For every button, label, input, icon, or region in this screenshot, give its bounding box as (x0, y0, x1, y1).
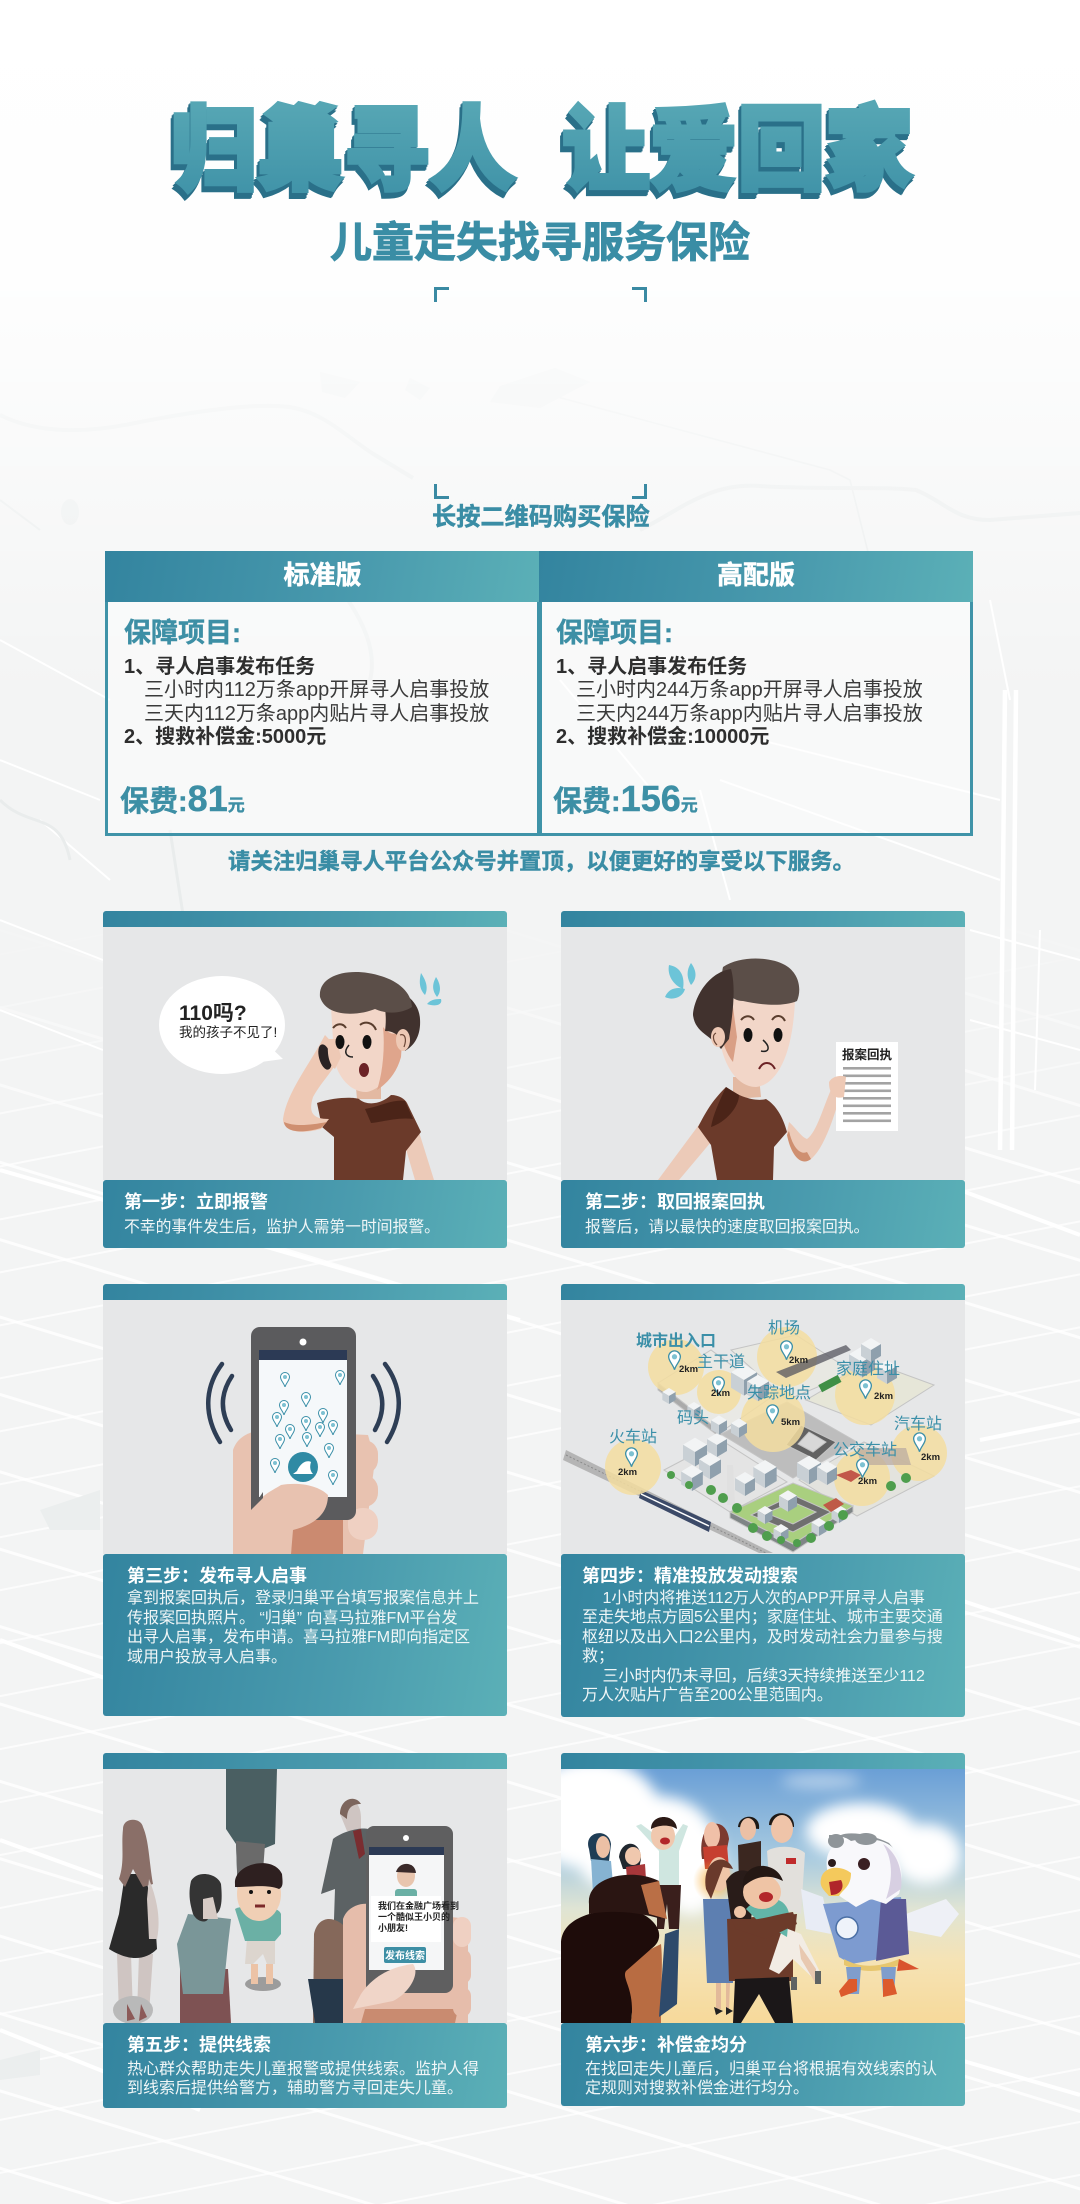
standard coverage list: 2、搜救补偿金:5000元 (124, 726, 326, 748)
premium coverage list: 三天内244万条app内贴片寻人启事投放 (576, 703, 923, 725)
map pins and distances: 5km (781, 1417, 800, 1428)
step 5 text: 到线索后提供给警方，辅助警方寻回走失儿童。 (127, 2080, 463, 2097)
step 4 text: 至走失地点方圆5公里内；家庭住址、城市主要交通 (582, 1609, 943, 1626)
icon: signal waves (208, 1364, 399, 1442)
child in parent's arms (731, 1866, 821, 1990)
receipt paper: 报案回执 (842, 1047, 892, 1062)
panel: step 1 (103, 911, 507, 1248)
step 4 title: 第四步：精准投放发动搜索 (582, 1566, 798, 1586)
phone with alert: 小朋友! (378, 1922, 408, 1933)
step 6 top bar (561, 1753, 965, 1769)
receipt paper (829, 1042, 898, 1131)
premium plan header (539, 551, 973, 602)
icon: sweat drops (420, 973, 441, 1005)
title: 归巢寻人 (171, 100, 516, 202)
map labels: 机场 (768, 1319, 800, 1337)
step 6 text (585, 2060, 937, 2097)
standing woman left (109, 1820, 159, 2024)
step 2 text: 报警后，请以最快的速度取回报案回执。 (585, 1219, 869, 1236)
premium fee: 保费:156元 (553, 778, 698, 819)
map pins and distances: 2km (858, 1476, 877, 1487)
standard coverage list: 三小时内112万条app开屏寻人启事投放 (144, 679, 489, 701)
man top center (226, 1769, 277, 1899)
panel: step 3 (103, 1284, 507, 1716)
illustration: man calling 110 (103, 927, 507, 1180)
premium coverage list (556, 656, 923, 748)
panel: premium plan (539, 551, 973, 836)
step 3 text: 出寻人启事，发布申请。喜马拉雅FM即向指定区 (127, 1629, 470, 1646)
panel: step 4 (561, 1284, 965, 1717)
step 5 text: 热心群众帮助走失儿童报警或提供线索。监护人得 (127, 2061, 479, 2078)
step 3 text: 域用户投放寻人启事。 (127, 1649, 287, 1666)
map labels: 汽车站 (894, 1415, 942, 1433)
step 5 title: 第五步：提供线索 (127, 2035, 271, 2055)
map pins and distances (618, 1341, 940, 1487)
QR code frame brackets (434, 287, 647, 499)
standard plan header: 标准版 (283, 560, 362, 590)
railway and train (563, 1450, 773, 1553)
map labels: 火车站 (609, 1428, 657, 1446)
step 4 text: 1小时内将推送112万人次的APP开屏寻人启事 (602, 1590, 925, 1607)
map labels: 城市出入口 (636, 1331, 716, 1350)
lost boy (235, 1863, 283, 1991)
background crowd (588, 1813, 805, 1929)
man on phone (283, 972, 434, 1180)
map pins and distances: 2km (711, 1388, 730, 1399)
foreground man from behind (561, 1875, 679, 2023)
standard coverage list: 1、寻人启事发布任务 (124, 656, 315, 678)
step 6 caption (561, 2023, 965, 2106)
step 2 top bar (561, 911, 965, 927)
phone with alert: 发布线索 (385, 1949, 425, 1962)
map pins and distances: 2km (921, 1452, 940, 1463)
step 6 text: 在找回走失儿童后，归巢平台将根据有效线索的认 (585, 2061, 937, 2078)
step 2 title: 第二步：取回报案回执 (585, 1192, 765, 1212)
step 6 title: 第六步：补偿金均分 (585, 2035, 747, 2055)
illustration: man with receipt (561, 927, 965, 1180)
glow (693, 1859, 737, 1903)
step 3 text (127, 1589, 479, 1666)
step 1 text: 不幸的事件发生后，监护人需第一时间报警。 (124, 1219, 440, 1236)
premium coverage list: 2、搜救补偿金:10000元 (556, 726, 769, 748)
map pins and distances: 2km (618, 1467, 637, 1478)
step 4 top bar (561, 1284, 965, 1300)
panel: step 6 (561, 1753, 965, 2106)
standard coverage list (124, 656, 489, 748)
notice text: 请关注归巢寻人平台公众号并置顶，以便更好的享受以下服务。 (228, 849, 855, 874)
phone with alert: 一个酷似王小贝的 (378, 1911, 450, 1922)
QR caption: 长按二维码购买保险 (432, 504, 650, 531)
speech bubble (159, 976, 285, 1074)
premium coverage list: 三小时内244万条app开屏寻人启事投放 (576, 679, 923, 701)
man in suit right (321, 1799, 373, 1949)
step 5 top bar (103, 1753, 507, 1769)
map pins and distances: 2km (874, 1391, 893, 1402)
step 5 caption (103, 2023, 507, 2108)
step 3 caption (103, 1554, 507, 1716)
buildings (662, 1338, 911, 1542)
title (170, 100, 916, 202)
illustration: isometric city map (561, 1300, 965, 1554)
city blocks (658, 1335, 934, 1552)
parent hugging child (726, 1870, 797, 2023)
subtitle: 儿童走失找寻服务保险 (330, 219, 750, 266)
title: 让爱回家 (562, 100, 913, 202)
map labels (609, 1319, 942, 1459)
map pins and distances: 2km (789, 1355, 808, 1366)
standard coverage list: 三天内112万条app内贴片寻人启事投放 (144, 703, 489, 725)
step 3 text: 传报案回执照片。 “归巢” 向喜马拉雅FM平台发 (127, 1610, 458, 1627)
map pins and distances: 2km (679, 1364, 698, 1375)
illustration: hand holding phone (103, 1300, 507, 1554)
premium coverage list: 1、寻人启事发布任务 (556, 656, 747, 678)
speech bubble: 110吗? (179, 1002, 247, 1025)
speech bubble: 我的孩子不见了! (179, 1025, 277, 1040)
step 2 caption (561, 1180, 965, 1248)
map labels: 公交车站 (833, 1441, 897, 1459)
clouds (521, 1759, 961, 1914)
premium plan header: 高配版 (717, 560, 795, 590)
step 1 title: 第一步：立即报警 (124, 1192, 268, 1212)
panel: step 2 (561, 911, 965, 1248)
eagle mascot (801, 1833, 959, 1997)
yellow search circles (605, 1327, 947, 1506)
map labels: 码头 (677, 1409, 709, 1427)
step 4 text: 三小时内仍未寻回，后续3天持续推送至少112 (602, 1668, 925, 1685)
step 4 text: 救； (582, 1648, 614, 1665)
panel: step 5 (103, 1753, 507, 2108)
man holding paper (658, 958, 841, 1180)
step 4 text (582, 1589, 943, 1704)
woman with dark hair (177, 1874, 231, 2023)
step 5 text (127, 2060, 479, 2097)
phone with alert (308, 1826, 471, 2023)
premium coverage heading: 保障项目: (556, 618, 673, 648)
step 1 top bar (103, 911, 507, 927)
phone with alert: 我们在金融广场看到 (378, 1900, 459, 1911)
step 4 caption (561, 1554, 965, 1717)
trees (667, 1375, 911, 1547)
icon: sweat drops (665, 963, 696, 999)
standard premium: 保费:81元 (120, 778, 245, 819)
hand holding phone (233, 1327, 378, 1554)
map labels: 家庭住址 (836, 1360, 900, 1378)
illustration: crowd and phone (103, 1769, 507, 2023)
step 3 title: 第三步：发布寻人启事 (127, 1566, 307, 1586)
step 3 text: 拿到报案回执后，登录归巢平台填写报案信息并上 (127, 1590, 479, 1607)
standard coverage heading: 保障项目: (124, 618, 241, 648)
map labels: 失踪地点 (747, 1384, 811, 1402)
step 1 caption (103, 1180, 507, 1248)
step 3 top bar (103, 1284, 507, 1300)
step 4 text: 枢纽以及出入口2公里内，及时发动社会力量参与搜 (582, 1629, 943, 1646)
step 4 text: 万人次贴片广告至200公里范围内。 (582, 1687, 833, 1704)
panel: standard plan (105, 551, 540, 836)
map labels: 主干道 (697, 1353, 745, 1371)
woman in blue dress (703, 1857, 739, 2015)
standard plan header (105, 551, 540, 602)
illustration: family reunion with eagle mascot (561, 1769, 965, 2023)
step 6 text: 定规则对搜救补偿金进行均分。 (585, 2080, 809, 2097)
